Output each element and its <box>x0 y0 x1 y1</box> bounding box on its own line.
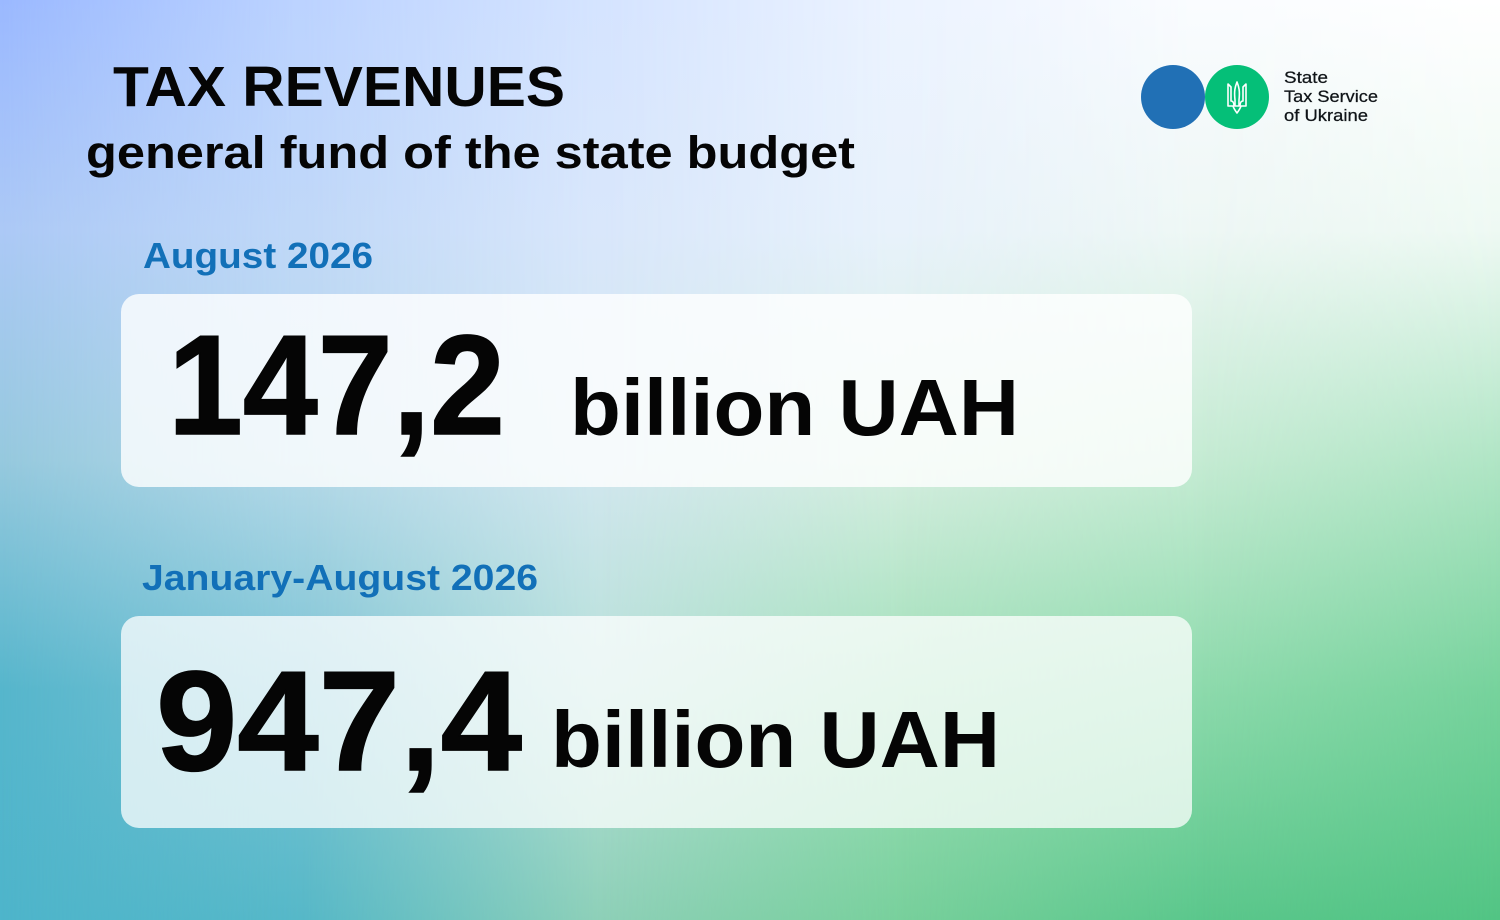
panel: January-August 2026 value <box>121 616 1192 828</box>
logo text: State <box>1284 68 1328 87</box>
icon: trident <box>1228 82 1246 113</box>
heading: January-August 2026: January-August 2026 <box>142 557 538 598</box>
logo: State Tax Service of Ukraine <box>1141 65 1378 129</box>
number: 947,4: 947,4 <box>156 642 522 801</box>
title: TAX REVENUES <box>113 55 565 119</box>
number: 147,2: 147,2 <box>168 306 505 465</box>
panel: August 2026 value <box>121 294 1192 487</box>
heading: August 2026: August 2026 <box>143 235 373 276</box>
unit: billion UAH: billion UAH <box>570 363 1019 452</box>
logo text <box>1284 68 1378 125</box>
logo text: of Ukraine <box>1284 106 1368 125</box>
unit: billion UAH: billion UAH <box>551 695 1000 784</box>
logo text: Tax Service <box>1284 87 1378 106</box>
subtitle: general fund of the state budget <box>86 127 855 178</box>
